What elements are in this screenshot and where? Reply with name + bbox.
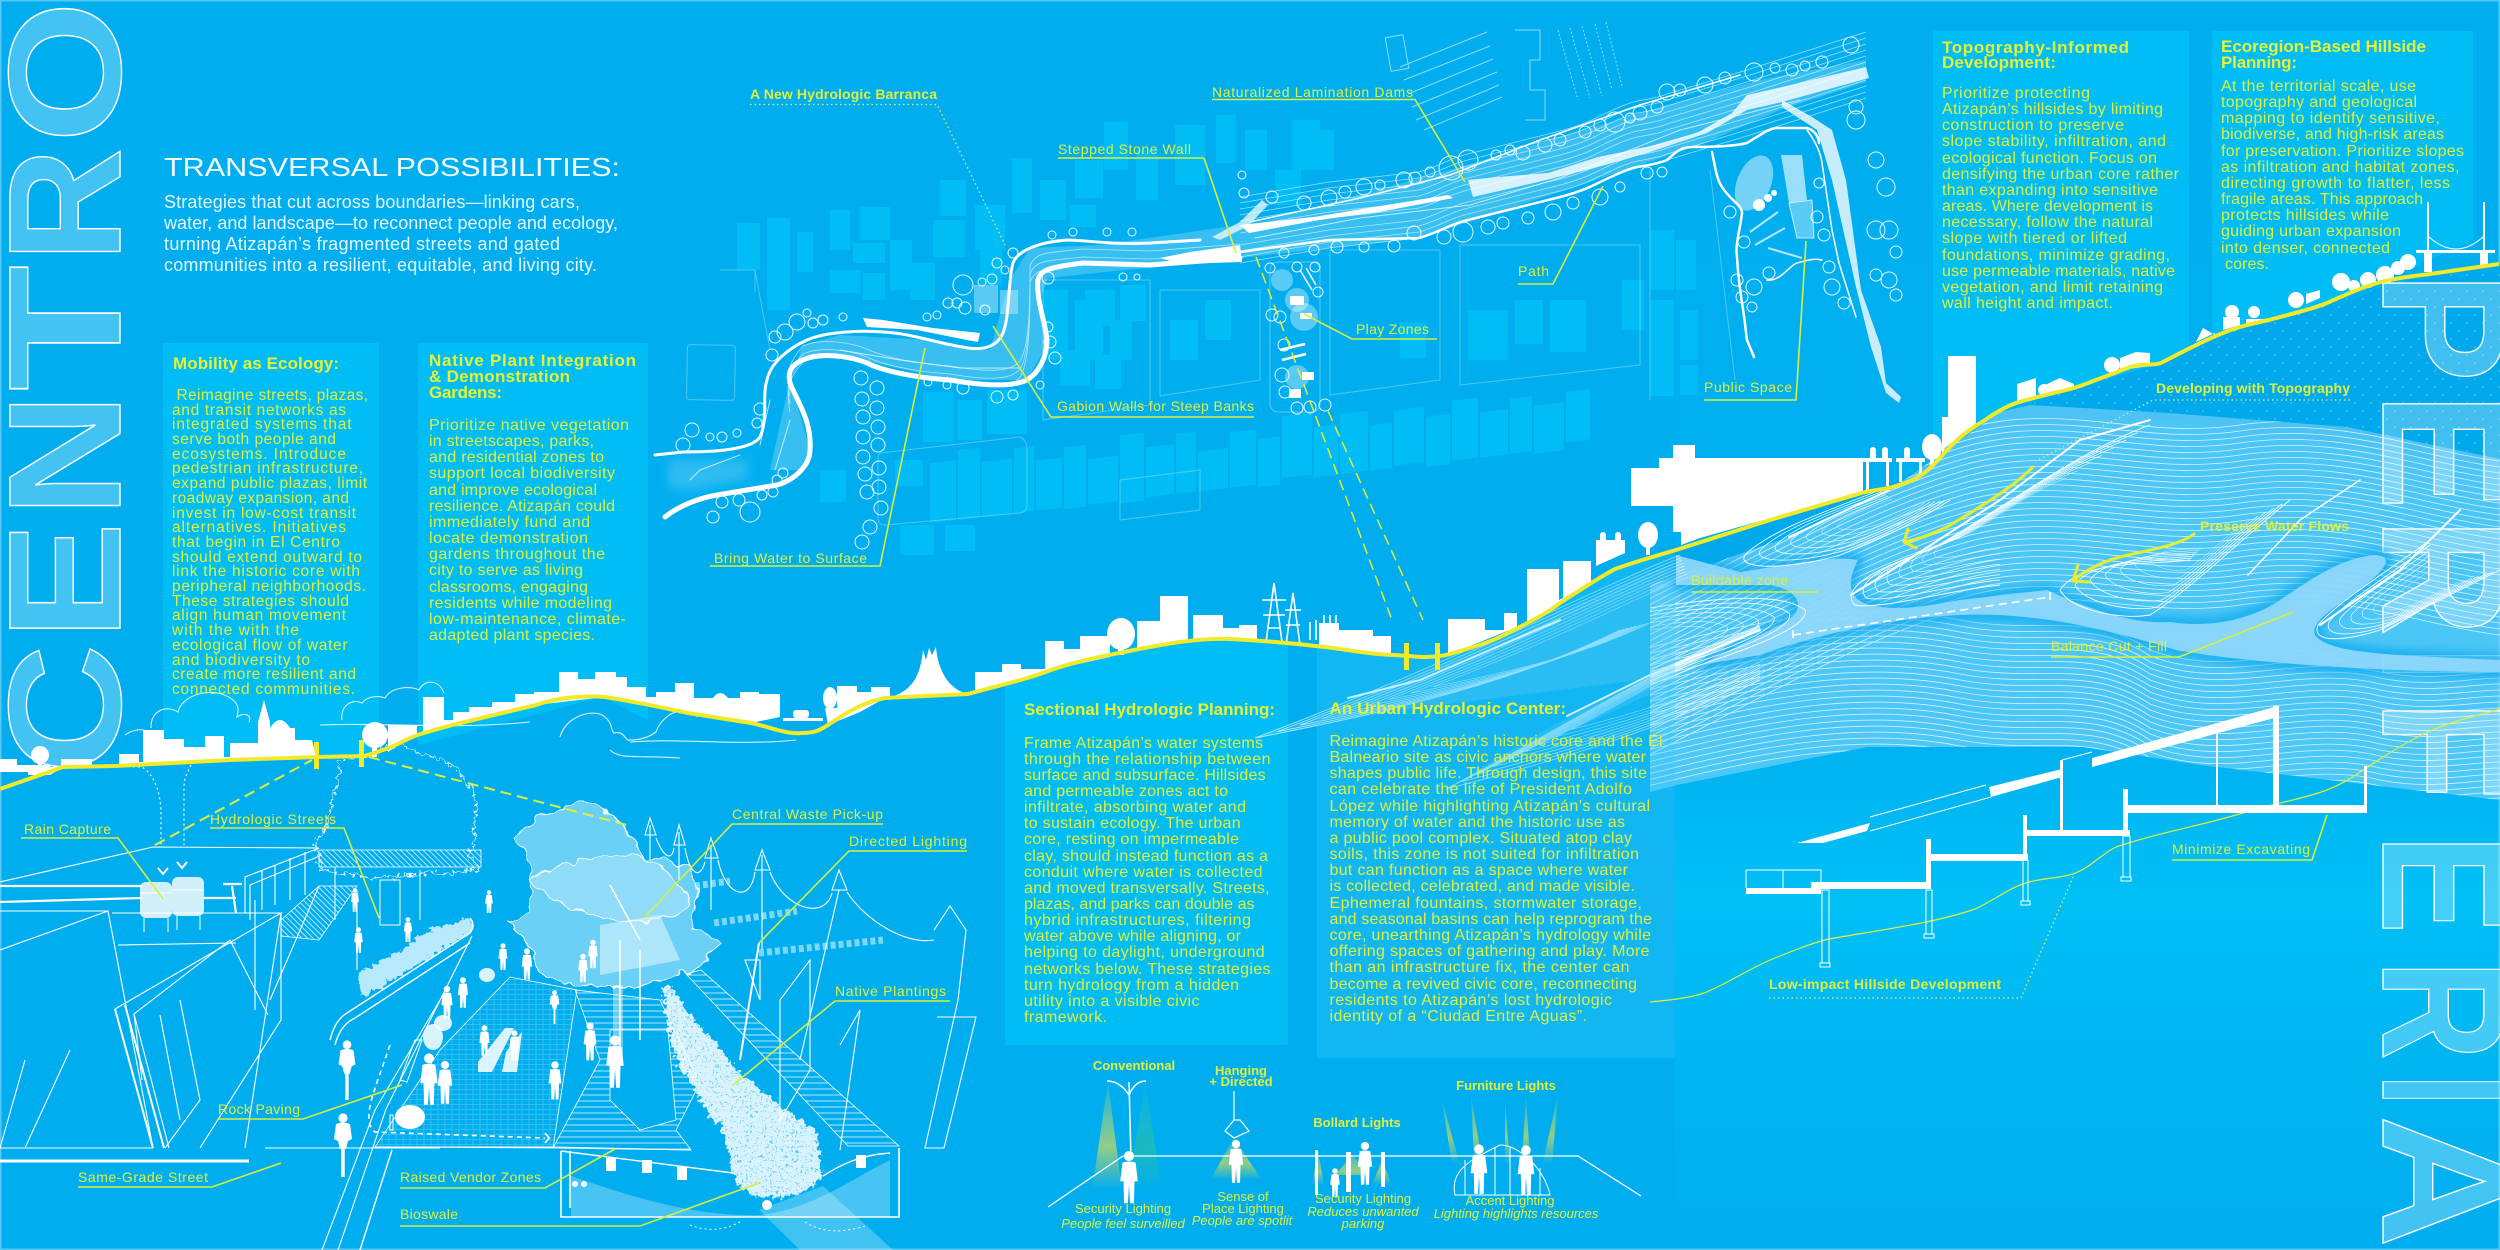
panel: sectional hydrologic planning: conduit where water is collected xyxy=(1024,864,1262,881)
panel: ecoregion-based hillside planning: At the territorial scale, use xyxy=(2221,78,2416,95)
axon: tile roofs xyxy=(281,850,481,940)
section line xyxy=(0,264,2499,789)
label: hydrologic streets xyxy=(210,811,379,918)
lighting diagram: Security Lighting xyxy=(1075,1201,1171,1216)
panel: mobility as ecology xyxy=(171,354,368,698)
panel: sectional hydrologic planning: and moved transversally. Streets, xyxy=(1024,880,1270,897)
label: naturalized lamination dams xyxy=(1212,84,1465,182)
label: a new hydrologic barranca xyxy=(750,86,1005,245)
intro paragraph: water, and landscape—to reconnect people and ecology, xyxy=(163,213,618,233)
panel: an urban hydrologic center: residents to Atizapán’s lost hydrologic xyxy=(1330,992,1612,1009)
panel: sectional hydrologic planning: water above while aligning, or xyxy=(1023,928,1242,945)
label: gabion walls: Gabion Walls for Steep Banks xyxy=(1057,398,1254,414)
light band halo xyxy=(1676,555,2500,672)
ground line of hillside section xyxy=(1650,709,2500,1002)
panel: sectional hydrologic planning: surface and subsurface. Hillsides xyxy=(1024,767,1266,784)
lighting diagram: People are spotlit xyxy=(1192,1213,1294,1228)
panel: mobility as ecology: invest in low-cost transit xyxy=(172,505,357,522)
panel: sectional hydrologic planning: utility into a visible civic xyxy=(1024,993,1200,1010)
hillside contour tone xyxy=(1640,400,2500,800)
contour fingers xyxy=(1255,425,2500,789)
label: preserve water flows: Preserve Water Flows xyxy=(2200,518,2349,534)
background gradient right xyxy=(1675,0,2500,1250)
skyline: bridge cable xyxy=(2428,236,2484,249)
label: bioswale xyxy=(400,1183,759,1226)
letters: CENTRO xyxy=(0,1,154,774)
panel: ecoregion-based hillside planning: topography and geological xyxy=(2221,94,2417,111)
lighting diagram: Furniture Lights xyxy=(1456,1078,1556,1093)
label: same-grade street: Same-Grade Street xyxy=(78,1169,208,1185)
axon: bioswale planting xyxy=(663,987,823,1198)
label: low-impact hillside development xyxy=(1769,877,2073,998)
panel: sectional hydrologic planning: turn hydrology from a hidden xyxy=(1024,977,1239,994)
plan: tree canopies xyxy=(676,37,1902,549)
label: stepped stone wall: Stepped Stone Wall xyxy=(1058,141,1191,157)
panel: mobility as ecology: These strategies should xyxy=(172,593,349,610)
panel: topography-informed development: vegetation, and limit retaining xyxy=(1942,279,2163,296)
panel: topography-informed development: than expanding into sensitive xyxy=(1942,182,2158,199)
axon: trellis posts and arcs xyxy=(645,818,976,1150)
panel: sectional hydrologic planning: Sectional Hydrologic Planning: xyxy=(1024,700,1275,719)
lighting diagram: Bollard Lights xyxy=(1313,1115,1401,1130)
plan: river lines xyxy=(655,75,1856,517)
panel: native plant integration: residents while modeling xyxy=(429,595,612,612)
panel: ecoregion-based hillside planning: cores. xyxy=(2225,256,2269,273)
panel: an urban hydrologic center: López while highlighting Atizapán’s cultural xyxy=(1330,798,1650,815)
label: bring water to surface xyxy=(710,348,925,566)
panel backgrounds xyxy=(163,31,2473,1045)
lighting diagram: parking xyxy=(1341,1216,1385,1231)
panel: native plant integration: Prioritize native vegetation xyxy=(429,417,629,434)
contour lines: hillside families xyxy=(1650,418,2500,799)
label: path xyxy=(1518,186,1603,284)
intro paragraph: communities into a resilient, equitable, and living city. xyxy=(164,255,597,275)
panel: an urban hydrologic center: identity of a “Ciudad Entre Aguas”. xyxy=(1330,1008,1587,1025)
panel: mobility as ecology: expand public plazas, limit xyxy=(172,475,368,492)
panel: an urban hydrologic center: soils, this zone is not suited for infiltration xyxy=(1330,846,1639,863)
panel: mobility as ecology: link the historic core with xyxy=(172,563,360,580)
label: buildable zone xyxy=(1691,572,1818,592)
hillside house section xyxy=(1746,706,2367,894)
panel: an urban hydrologic center: memory of water and the historic use as xyxy=(1330,814,1625,831)
label: balance cut and fill: Balance Cut + Fill xyxy=(2051,638,2167,654)
panel: an urban hydrologic center: Reimagine Atizapán’s historic core and the El xyxy=(1330,733,1662,750)
panel: topography-informed development: slope stability, infiltration, and xyxy=(1942,133,2166,150)
plan: river water bands xyxy=(863,67,1901,403)
panel: an urban hydrologic center: become a revived civic core, reconnecting xyxy=(1330,976,1637,993)
label: rock paving: Rock Paving xyxy=(218,1101,300,1117)
panel: an urban hydrologic center: and seasonal basins can help reprogram the xyxy=(1330,911,1652,928)
axon: canopy tree xyxy=(510,803,720,1060)
panel: sectional hydrologic planning: through the relationship between xyxy=(1024,751,1270,768)
panel: an urban hydrologic center xyxy=(1330,699,1662,1025)
panel: mobility as ecology: connected communities. xyxy=(172,681,355,698)
plan: building footprints xyxy=(687,22,1735,555)
label: play zones: Play Zones xyxy=(1356,321,1429,337)
label: low-impact hillside development: Low-impact Hillside Development xyxy=(1769,976,2001,992)
hillside ground fill xyxy=(1650,264,2500,600)
letters: PERIFERIA xyxy=(2345,272,2500,1248)
plan: river corridor light fill xyxy=(770,60,1866,470)
panel: ecoregion-based hillside planning: mapping to identify sensitive, xyxy=(2221,110,2440,127)
panel: native plant integration: classrooms, engaging xyxy=(429,579,588,596)
plan: play zones xyxy=(1270,262,1320,412)
axon: people and furniture xyxy=(334,888,624,1177)
label: developing with topography: Developing with Topography xyxy=(2156,380,2350,396)
label: native plantings: Native Plantings xyxy=(835,983,946,999)
panel: topography-informed development: necessary, follow the natural xyxy=(1942,214,2153,231)
axon: planter wedge xyxy=(358,918,472,998)
panel: urban hydrologic center backdrop xyxy=(1317,548,1675,1058)
panel: an urban hydrologic center: Ephemeral fountains, stormwater storage, xyxy=(1330,895,1642,912)
panel: sectional hydrologic planning: and permeable zones act to xyxy=(1024,783,1228,800)
label: raised vendor zones: Raised Vendor Zones xyxy=(400,1169,541,1185)
panel: ecoregion-based hillside planning: for preservation. Prioritize slopes xyxy=(2221,143,2464,160)
plan: river contour lines xyxy=(788,32,1866,412)
panel: an urban hydrologic center: can celebrate the life of President Adolfo xyxy=(1330,781,1632,798)
panel: native plant integration: support local biodiversity xyxy=(429,465,615,482)
panel: topography-informed development xyxy=(1941,38,2180,312)
axon: rock paving plaza xyxy=(375,977,577,1148)
panel: ecoregion-based hillside planning: fragile areas. This approach xyxy=(2221,191,2423,208)
label: same-grade street xyxy=(78,1163,281,1187)
panel: an urban hydrologic center: a public pool complex. Situated atop clay xyxy=(1330,830,1632,847)
panel: sectional hydrologic planning: core, resting on impermeable xyxy=(1024,831,1239,848)
contour ridge highlights xyxy=(1348,420,2460,716)
hillside stipple xyxy=(2000,264,2500,459)
panel: sectional hydrologic planning: framework. xyxy=(1024,1009,1107,1026)
panel: sectional hydrologic planning: helping to daylight, underground xyxy=(1024,944,1265,961)
panel: native plant integration: Native Plant Integration xyxy=(429,351,636,370)
label: gabion walls xyxy=(993,326,1254,417)
panel: an urban hydrologic center: but can function as a space where water xyxy=(1330,862,1629,879)
panel: mobility as ecology: should extend outward to xyxy=(172,549,362,566)
panel: sectional hydrologic planning xyxy=(1023,700,1275,1026)
panel: native plant integration: and improve ecological xyxy=(429,482,597,499)
lighting diagram: Security Lighting xyxy=(1315,1191,1411,1206)
label: minimize excavating: Minimize Excavating xyxy=(2172,841,2310,857)
panel: mobility as ecology: peripheral neighborhoods. xyxy=(172,578,366,595)
panel: native plant integration: locate demonstration xyxy=(429,530,588,547)
label: directed lighting xyxy=(759,833,967,943)
lighting diagram: People feel surveilled xyxy=(1061,1216,1186,1231)
panel: topography-informed development: densifying the urban core rather xyxy=(1942,166,2180,183)
intro paragraph: turning Atizapán’s fragmented streets and gated xyxy=(164,234,560,254)
outline tree behind axon xyxy=(315,746,478,880)
lighting diagram: Reduces unwanted xyxy=(1307,1204,1419,1219)
panel: sectional hydrologic planning: clay, should instead function as a xyxy=(1024,848,1268,865)
label: central waste pick-up: Central Waste Pick-up xyxy=(732,806,883,822)
panel: an urban hydrologic center: than an infrastructure fix, the center can xyxy=(1330,959,1630,976)
panel: an urban hydrologic center: Balneario site as civic anchors where water xyxy=(1330,749,1647,766)
panel: ecoregion-based hillside planning: protects hillsides while xyxy=(2221,207,2389,224)
panel: sectional hydrologic planning: Frame Atizapán’s water systems xyxy=(1024,735,1263,752)
panel: topography-informed development: Development: xyxy=(1942,53,2056,72)
panel: native plant integration: gardens throughout the xyxy=(429,546,605,563)
panel: native plant integration: low-maintenance, climate- xyxy=(429,611,626,628)
panel: mobility as ecology: ecosystems. Introduce xyxy=(172,446,346,463)
intro paragraph xyxy=(163,192,618,275)
intro paragraph: Strategies that cut across boundaries—linking cars, xyxy=(164,192,580,212)
label: hydrologic streets: Hydrologic Streets xyxy=(210,811,336,827)
panel: mobility as ecology: roadway expansion, and xyxy=(172,490,349,507)
panel: an urban hydrologic center: shapes public life. Through design, this site xyxy=(1330,765,1647,782)
panel: topography-informed development: areas. Where development is xyxy=(1942,198,2153,215)
label: naturalized lamination dams: Naturalized Lamination Dams xyxy=(1212,84,1413,100)
label: buildable zone: Buildable zone xyxy=(1691,572,1788,588)
plan: public space xyxy=(1727,150,1814,258)
lighting diagram: Accent Lighting xyxy=(1466,1193,1554,1208)
axon: stepped decks xyxy=(553,970,899,1150)
skyline: electrical towers xyxy=(1262,583,1336,645)
panel: topography-informed development: Atizapán’s hillsides by limiting xyxy=(1942,101,2163,118)
label: bioswale: Bioswale xyxy=(400,1206,458,1222)
panel: an urban hydrologic center: An Urban Hydrologic Center: xyxy=(1330,699,1566,718)
panel: an urban hydrologic center: is collected, celebrated, and made visible. xyxy=(1330,878,1635,895)
panel: native plant integration: city to serve as living xyxy=(429,562,583,579)
house section piles xyxy=(1746,752,2131,967)
label: balance cut and fill xyxy=(2051,612,2293,657)
panel: mobility as ecology: integrated systems that xyxy=(172,416,352,433)
panel: native plant integration: resilience. Atizapán could xyxy=(429,498,615,515)
panel: sectional hydrologic planning: infiltrate, absorbing water and xyxy=(1024,799,1246,816)
plan: left wash xyxy=(668,460,750,490)
panel: mobility as ecology: with the with the xyxy=(171,622,299,639)
label: minimize excavating xyxy=(2172,815,2327,860)
panel: ecoregion-based hillside planning: Planning: xyxy=(2221,53,2297,72)
white dotted water lines xyxy=(113,765,191,845)
label: directed lighting: Directed Lighting xyxy=(849,833,967,849)
skyline: right district xyxy=(1448,202,2495,653)
panel: topography-informed development: wall height and impact. xyxy=(1941,295,2113,312)
panel: mobility as ecology: Mobility as Ecology: xyxy=(173,354,339,373)
light band: buildable zone xyxy=(1676,555,2500,672)
panel: ecoregion-based hillside planning: into denser, connected xyxy=(2221,240,2390,257)
clouds behind skyline xyxy=(125,682,796,758)
axon: hanging banners xyxy=(695,881,883,953)
title: TRANSVERSAL POSSIBILITIES: xyxy=(164,152,620,182)
panel: native plant integration: & Demonstration xyxy=(429,367,570,386)
dashed measure: cut and fill xyxy=(1793,592,2050,640)
panel: native plant integration: Gardens: xyxy=(429,383,502,402)
panel: mobility as ecology: and transit networks as xyxy=(172,402,346,419)
panel: topography-informed development: foundations, minimize grading, xyxy=(1942,247,2170,264)
panel: mobility as ecology: align human movement xyxy=(172,607,347,624)
label: rain capture xyxy=(21,821,163,899)
panel: sectional hydrologic planning: plazas, and parks can double as xyxy=(1024,896,1254,913)
panel: sectional hydrologic planning: hybrid infrastructures, filtering xyxy=(1024,912,1251,929)
label: native plantings xyxy=(733,983,950,1085)
label: public space: Public Space xyxy=(1704,379,1792,395)
panel: ecoregion-based hillside planning: as infiltration and habitat zones, xyxy=(2221,159,2460,176)
panel: mobility as ecology: alternatives. Initiatives xyxy=(172,519,346,536)
label: raised vendor zones xyxy=(400,1149,615,1188)
panel: ecoregion-based hillside planning: guiding urban expansion xyxy=(2221,223,2401,240)
panel: sectional hydrologic planning: to sustain ecology. The urban xyxy=(1024,815,1241,832)
panel: topography-informed development: Topography-Informed xyxy=(1942,38,2129,57)
axon: trough section xyxy=(561,1148,899,1250)
lighting diagram xyxy=(1048,1058,1641,1231)
lighting diagram: Sense of xyxy=(1217,1189,1269,1204)
panel: topography-informed development: use permeable materials, native xyxy=(1942,263,2175,280)
arrows: preserve water flows xyxy=(1904,467,2194,582)
label: a new hydrologic barranca: A New Hydrologic Barranca xyxy=(750,86,937,102)
section markers and dashed projection lines xyxy=(155,257,1440,845)
panel: mobility as ecology: that begin in El Centro xyxy=(172,534,340,551)
panel: ecoregion-based hillside planning: Ecoregion-Based Hillside xyxy=(2221,37,2426,56)
label: rock paving xyxy=(218,1085,402,1119)
label: bring water to surface: Bring Water to Surface xyxy=(714,550,867,566)
skyline: left district xyxy=(0,596,1391,775)
panel: topography-informed development: slope with tiered or lifted xyxy=(1942,230,2127,247)
panel: mobility as ecology: create more resilient and xyxy=(172,666,356,683)
panel: topography-informed development: Prioritize protecting xyxy=(1942,85,2090,102)
panel: topography-informed development: construction to preserve xyxy=(1942,117,2124,134)
lighting diagram: Place Lighting xyxy=(1202,1201,1284,1216)
panel: ecoregion-based hillside planning: biodiverse, and high-risk areas xyxy=(2221,126,2444,143)
label: developing with topography xyxy=(2038,380,2350,460)
panel: native plant integration: adapted plant species. xyxy=(429,627,595,644)
label: play zones xyxy=(1304,314,1437,339)
panel: topography-informed development: ecological function. Focus on xyxy=(1942,150,2157,167)
lighting diagram: Lighting highlights resources xyxy=(1434,1206,1599,1221)
panel: mobility as ecology: ecological flow of water xyxy=(172,637,348,654)
label: central waste pick-up xyxy=(644,806,883,918)
lighting diagram: Hanging xyxy=(1215,1063,1267,1078)
panel: native plant integration xyxy=(429,351,636,644)
panel: native plant integration: and residential zones to xyxy=(429,449,604,466)
lighting diagram: + Directed xyxy=(1209,1074,1273,1089)
panel: mobility as ecology: serve both people and xyxy=(172,431,336,448)
lighting diagram: Conventional xyxy=(1093,1058,1175,1073)
axon: drawing linework xyxy=(0,847,691,1250)
panel: native plant integration: immediately fund and xyxy=(429,514,590,531)
panel: mobility as ecology: pedestrian infrastructure, xyxy=(172,460,363,477)
axon: rain tanks xyxy=(140,862,204,932)
wedge tone xyxy=(1255,560,1680,789)
label: rain capture: Rain Capture xyxy=(24,821,111,837)
label: path: Path xyxy=(1518,263,1549,279)
panel: mobility as ecology: Reimagine streets, plazas, xyxy=(176,387,368,404)
panel: mobility as ecology: and biodiversity to xyxy=(172,652,310,669)
panel: native plant integration: in streetscapes, parks, xyxy=(429,433,594,450)
label: public space xyxy=(1704,241,1806,400)
panel: an urban hydrologic center: core, unearthing Atizapán’s hydrology while xyxy=(1330,927,1651,944)
label: stepped stone wall xyxy=(1058,141,1236,253)
panel: an urban hydrologic center: offering spaces of gathering and play. More xyxy=(1330,943,1650,960)
panel: sectional hydrologic planning: networks below. These strategies xyxy=(1024,961,1270,978)
panel: ecoregion-based hillside planning: directing growth to flatter, less xyxy=(2221,175,2450,192)
panel: ecoregion-based hillside planning xyxy=(2221,37,2464,273)
